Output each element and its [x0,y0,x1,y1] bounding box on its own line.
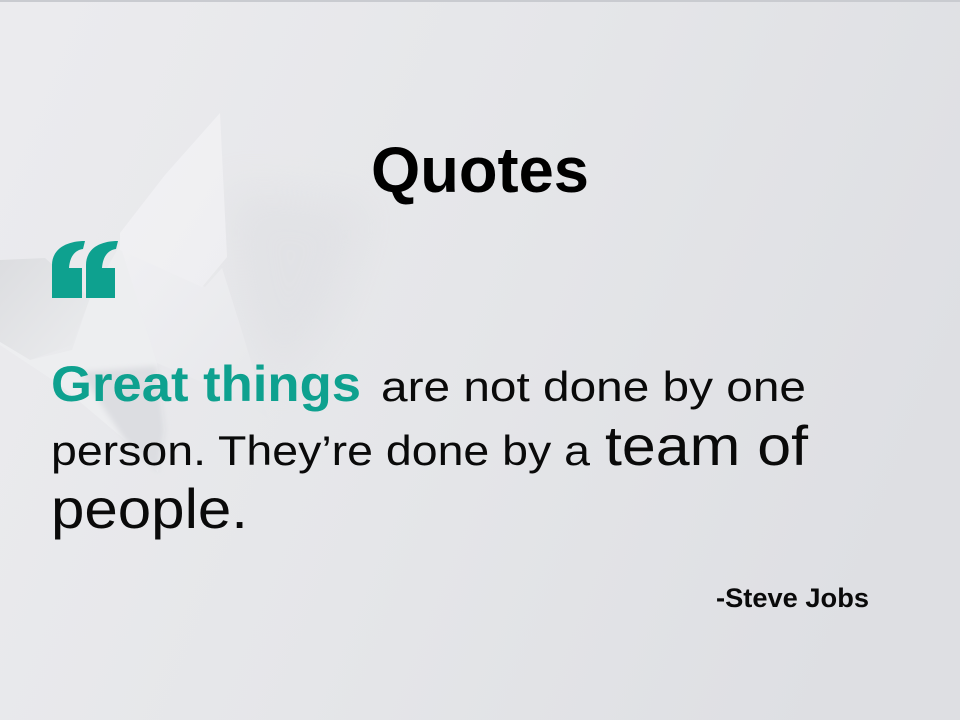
highlight: great things: Great things [51,356,361,412]
title: Quotes [371,134,589,206]
attribution: -Steve Jobs [716,583,869,613]
line 1 remainder: are not done by one [381,363,806,410]
line 3: people. [51,477,248,540]
emphasis: team of: team of [605,414,808,477]
quote text [51,356,808,540]
image: origami butterfly [0,113,370,472]
icon: quotation mark [52,241,118,298]
line 2: person. They’re done by a [51,427,591,474]
